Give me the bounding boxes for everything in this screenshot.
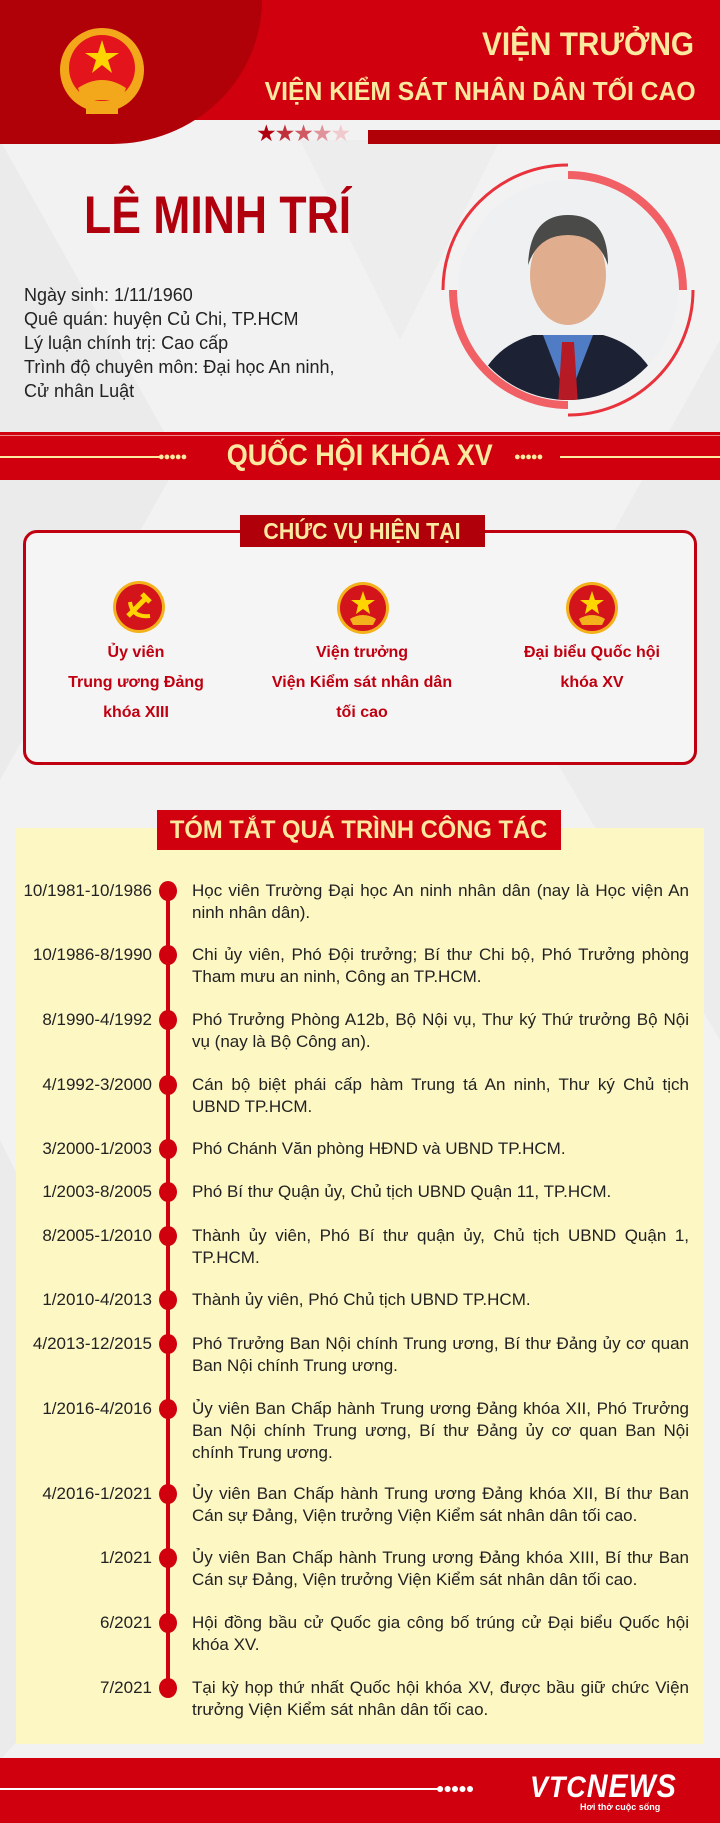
position 3: Đại biểu Quốc hội — [524, 644, 660, 661]
heading: timeline: TÓM TẮT QUÁ TRÌNH CÔNG TÁC — [170, 816, 548, 844]
timeline items: Phó Trưởng Ban Nội chính Trung ương, Bí thư Đảng ủy cơ quan Ban Nội chính Trung ương. — [192, 1334, 689, 1375]
timeline items: 3/2000-1/2003 — [42, 1139, 152, 1158]
timeline items: 1/2010-4/2013 — [42, 1290, 152, 1309]
heading: Chức vụ hiện tại: CHỨC VỤ HIỆN TẠI — [264, 518, 461, 544]
panel: current positions — [23, 530, 697, 765]
logo: VTC News: Hơi thở cuộc sống — [580, 1802, 660, 1812]
timeline items: 4/1992-3/2000 — [42, 1075, 152, 1094]
timeline items: 4/2016-1/2021 — [42, 1484, 152, 1503]
timeline items: Phó Bí thư Quận ủy, Chủ tịch UBND Quận 11, TP.HCM. — [192, 1182, 611, 1201]
position 1 — [68, 642, 204, 721]
position 2: Viện trưởng — [316, 644, 408, 661]
timeline items: Hội đồng bầu cử Quốc gia công bố trúng cử Đại biểu Quốc hội khóa XV. — [192, 1613, 689, 1654]
timeline items: Phó Chánh Văn phòng HĐND và UBND TP.HCM. — [192, 1139, 566, 1158]
personal info: Cử nhân Luật — [24, 381, 134, 401]
banner: Quốc hội khóa XV: ●●●●● — [158, 451, 186, 463]
position 3: khóa XV — [560, 674, 624, 691]
personal info: Quê quán: huyện Củ Chi, TP.HCM — [24, 309, 298, 329]
footer: ●●●●● — [436, 1780, 473, 1796]
icon: emblem 1 — [337, 582, 389, 634]
heading: Chức vụ hiện tại — [240, 515, 485, 547]
header red band — [0, 0, 720, 120]
timeline items: Học viên Trường Đại học An ninh nhân dân (nay là Học viện An ninh nhân dân). — [192, 881, 689, 922]
position 3 — [524, 644, 660, 691]
timeline items: Cán bộ biệt phái cấp hàm Trung tá An ninh, Thư ký Chủ tịch UBND TP.HCM. — [192, 1075, 689, 1116]
timeline items: 1/2003-8/2005 — [42, 1182, 152, 1201]
timeline items: 10/1986-8/1990 — [33, 945, 152, 964]
timeline items: 10/1981-10/1986 — [23, 881, 152, 900]
timeline items: Phó Trưởng Phòng A12b, Bộ Nội vụ, Thư ký Thứ trưởng Bộ Nội vụ (nay là Bộ Công an). — [192, 1010, 689, 1051]
timeline items: 7/2021 — [100, 1678, 152, 1697]
timeline items: Thành ủy viên, Phó Bí thư quận ủy, Chủ tịch UBND Quận 1, TP.HCM. — [192, 1226, 689, 1267]
header bar — [368, 130, 720, 144]
position 2 — [272, 644, 452, 721]
heading: timeline — [157, 810, 561, 850]
timeline items: 1/2021 — [100, 1548, 152, 1567]
title: VIỆN TRƯỞNG — [482, 26, 694, 62]
stars: ★★★★★ — [256, 120, 349, 146]
position 1: Ủy viên — [108, 644, 164, 661]
banner: Quốc hội khóa XV — [0, 432, 720, 480]
timeline items: 1/2016-4/2016 — [42, 1399, 152, 1418]
banner: Quốc hội khóa XV: QUỐC HỘI KHÓA XV — [227, 439, 493, 472]
position 2: Viện Kiểm sát nhân dân — [272, 674, 452, 691]
portrait — [442, 164, 694, 416]
icon: national emblem — [60, 28, 144, 114]
personal info — [24, 285, 335, 401]
timeline items: Ủy viên Ban Chấp hành Trung ương Đảng khóa XII, Phó Trưởng Ban Nội chính Trung ương, Bí thư Đảng ủy cơ quan Ban Nội chính Trung ương. — [192, 1399, 689, 1462]
position 1: khóa XIII — [103, 704, 169, 721]
banner: Quốc hội khóa XV: ●●●●● — [514, 451, 542, 463]
timeline items: Ủy viên Ban Chấp hành Trung ương Đảng khóa XIII, Bí thư Ban Cán sự Đảng, Viện trưởng Viện Kiểm sát nhân dân tối cao. — [192, 1548, 689, 1589]
logo: VTC News: VTCNEWS — [530, 1768, 677, 1804]
timeline items: Thành ủy viên, Phó Chủ tịch UBND TP.HCM. — [192, 1290, 531, 1309]
header dark corner — [0, 0, 262, 144]
timeline items: 6/2021 — [100, 1613, 152, 1632]
position 2: tối cao — [336, 704, 388, 721]
timeline items: Ủy viên Ban Chấp hành Trung ương Đảng khóa XII, Bí thư Ban Cán sự Đảng, Viện trưởng Viện Kiểm sát nhân dân tối cao. — [192, 1484, 689, 1525]
subtitle: VIỆN KIỂM SÁT NHÂN DÂN TỐI CAO — [265, 76, 696, 106]
panel: timeline — [16, 828, 704, 1744]
timeline items: Tại kỳ họp thứ nhất Quốc hội khóa XV, được bầu giữ chức Viện trưởng Viện Kiểm sát nhân dân tối cao. — [192, 1678, 689, 1719]
personal info: Ngày sinh: 1/11/1960 — [24, 285, 193, 305]
personal info: Trình độ chuyên môn: Đại học An ninh, — [24, 357, 335, 377]
name: LÊ MINH TRÍ — [84, 186, 351, 245]
icon: party — [113, 581, 165, 633]
personal info: Lý luận chính trị: Cao cấp — [24, 333, 228, 353]
timeline items: 8/2005-1/2010 — [42, 1226, 152, 1245]
timeline items: 8/1990-4/1992 — [42, 1010, 152, 1029]
footer — [0, 1758, 720, 1823]
position 1: Trung ương Đảng — [68, 674, 204, 691]
timeline items: 4/2013-12/2015 — [33, 1334, 152, 1353]
timeline items: Chi ủy viên, Phó Đội trưởng; Bí thư Chi bộ, Phó Trưởng phòng Tham mưu an ninh, Công an TP.HCM. — [192, 945, 689, 986]
timeline line — [166, 891, 170, 1691]
icon: emblem 2 — [566, 582, 618, 634]
